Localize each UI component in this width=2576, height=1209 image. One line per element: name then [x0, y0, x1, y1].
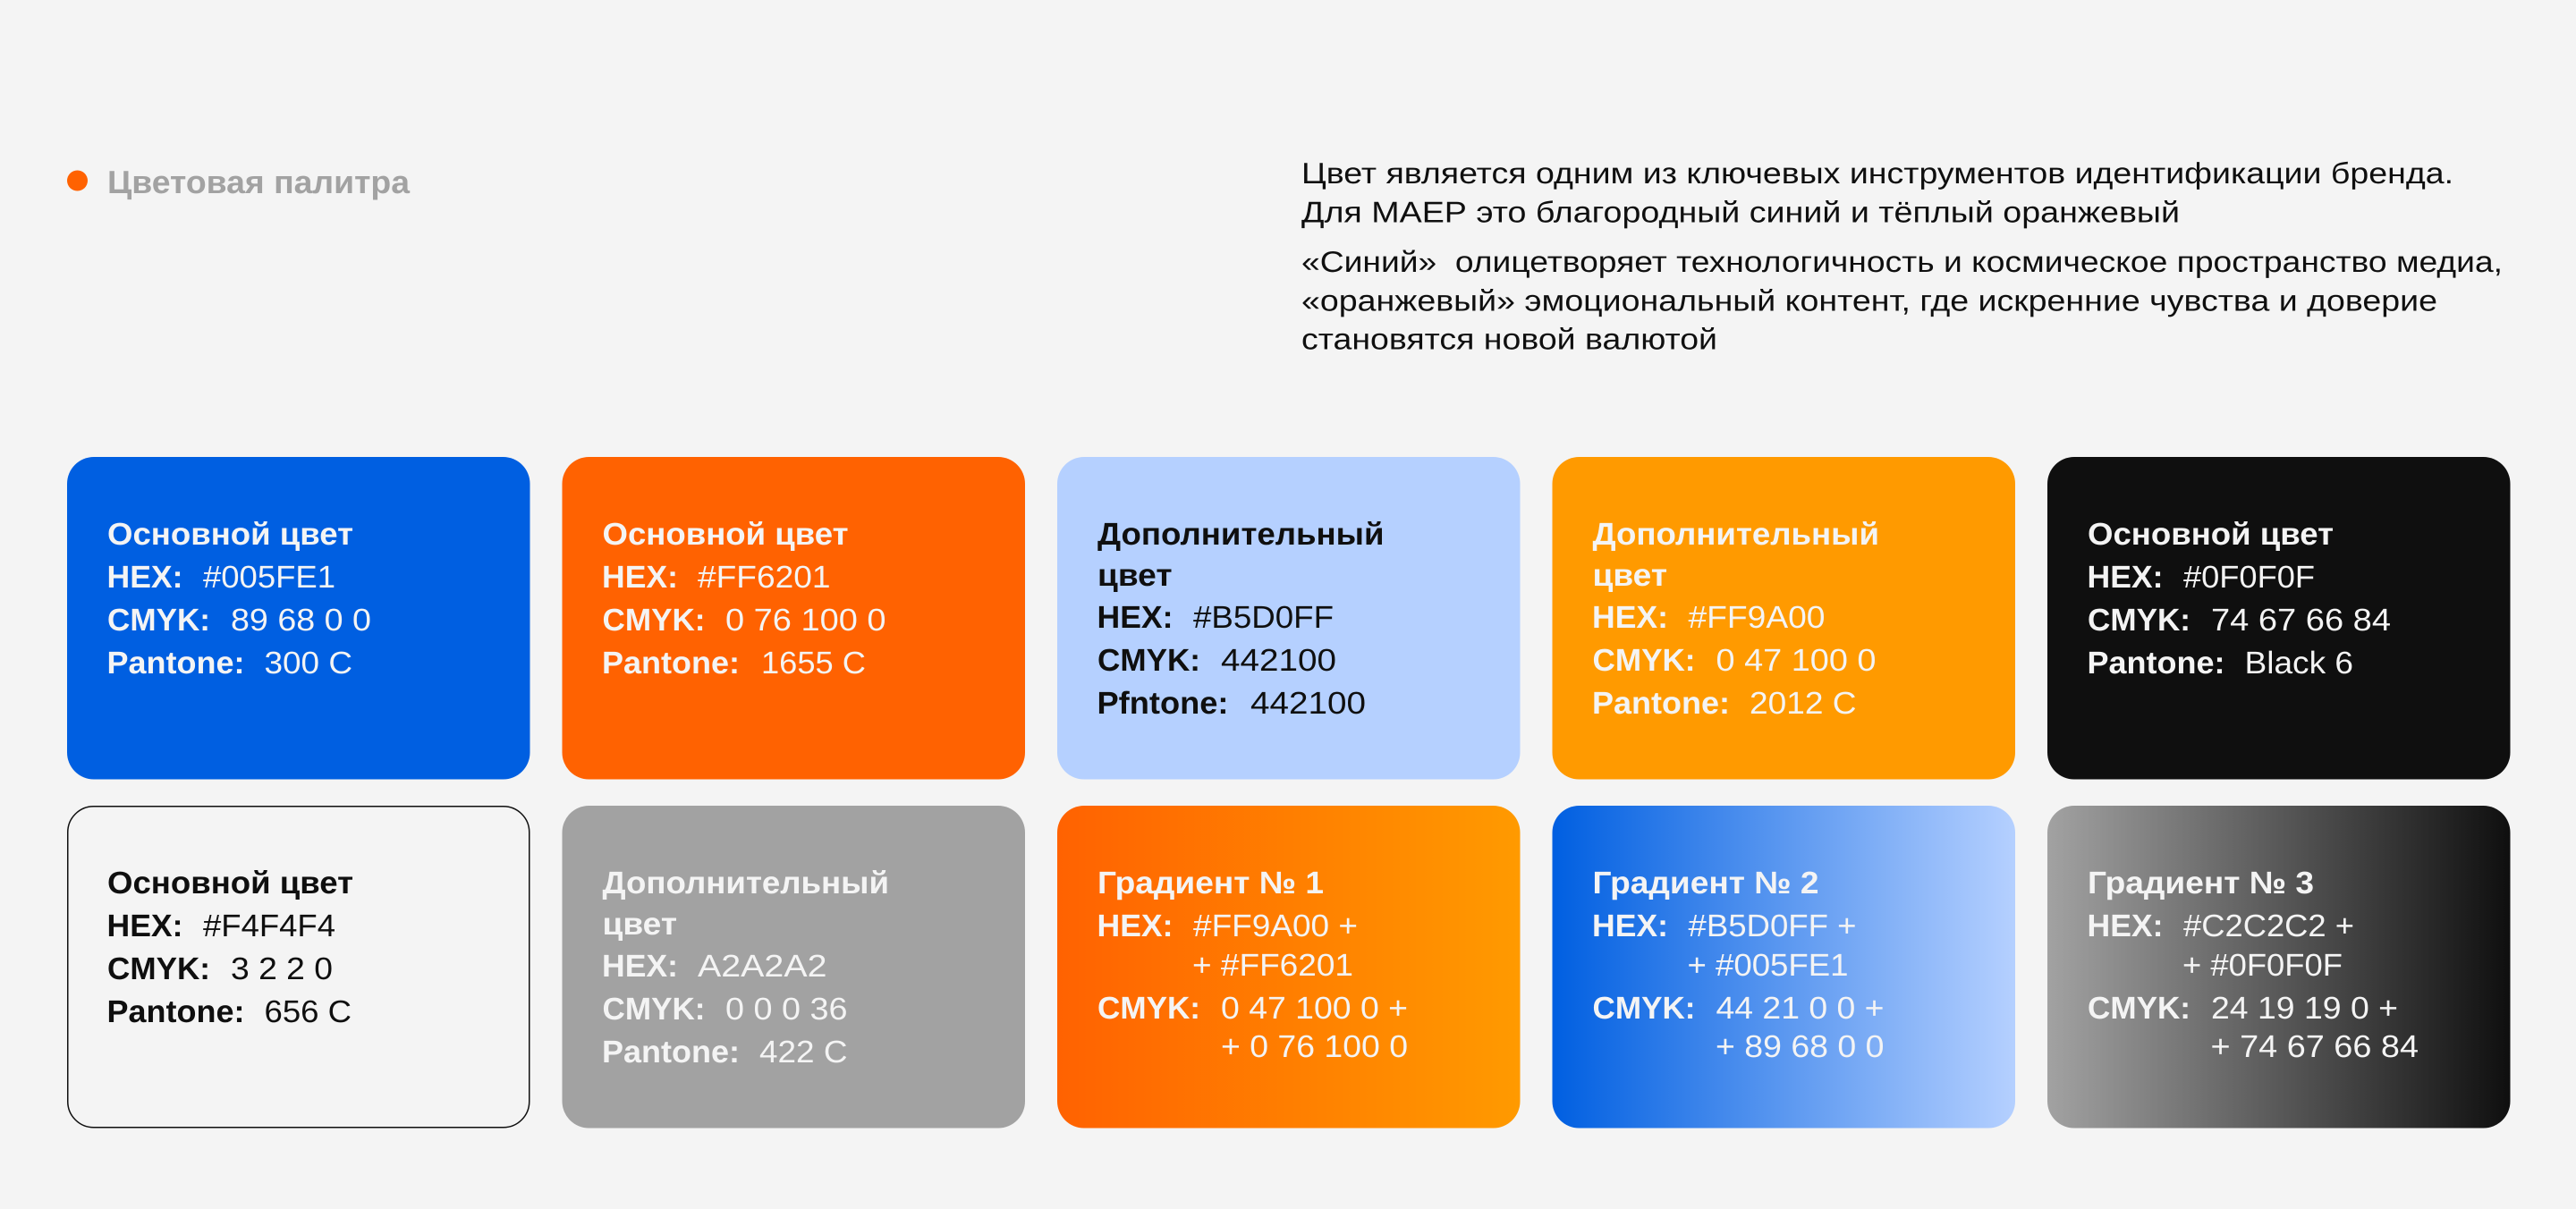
HEX row: #005FE1 [203, 560, 335, 595]
panel: additional amber [1553, 457, 2015, 780]
CMYK rows [2088, 991, 2419, 1064]
swatch [1057, 806, 1521, 1129]
panel: gradient 1 [1057, 806, 1521, 1129]
swatch [562, 806, 1025, 1129]
CMYK row: CMYK: [1592, 643, 1696, 678]
HEX row: #FF6201 [698, 560, 830, 595]
HEX row [1592, 600, 1825, 635]
HEX rows: #C2C2C2 + [2183, 909, 2354, 943]
swatch [1057, 457, 1521, 780]
Pantone row: Pantone: [1592, 686, 1730, 721]
HEX row: #FF9A00 [1689, 600, 1825, 635]
paragraph 1 [1301, 156, 2453, 229]
icon: orange dot [67, 170, 88, 191]
Pantone row [107, 646, 352, 681]
Pantone row: 1655 C [761, 646, 866, 681]
swatch [2047, 457, 2510, 780]
card title [1097, 517, 1385, 593]
HEX row: A2A2A2 [698, 949, 826, 984]
CMYK row: CMYK: [2088, 603, 2190, 638]
Pantone row: 442100 [1250, 686, 1366, 721]
intro text block [1301, 156, 2503, 356]
HEX rows: + #0F0F0F [2182, 948, 2343, 983]
CMYK rows [1592, 991, 1884, 1064]
section heading [67, 164, 411, 200]
CMYK row: 442100 [1221, 643, 1336, 678]
card title: цвет [603, 907, 677, 942]
swatch [67, 457, 530, 780]
HEX rows: #FF9A00 + [1193, 909, 1358, 943]
CMYK rows: CMYK: [1592, 991, 1696, 1026]
HEX row [107, 909, 335, 943]
HEX row [1097, 600, 1334, 635]
HEX rows: HEX: [2088, 909, 2163, 943]
Pantone row [602, 1035, 848, 1070]
HEX rows [1097, 909, 1358, 983]
CMYK row: 89 68 0 0 [231, 603, 371, 638]
HEX row: HEX: [2088, 560, 2163, 595]
panel: primary blue [67, 457, 530, 780]
Pantone row: Pantone: [2088, 646, 2225, 681]
swatch [1553, 457, 2015, 780]
Pantone row: Pantone: [107, 994, 245, 1029]
Pantone row: Black 6 [2245, 646, 2353, 681]
CMYK row: CMYK: [603, 992, 705, 1027]
CMYK row [107, 951, 333, 986]
card title: Основной цвет [2088, 517, 2334, 552]
Pantone row: 656 C [265, 994, 352, 1029]
Pantone row: Pantone: [602, 646, 740, 681]
CMYK row: CMYK: [107, 951, 210, 986]
CMYK row [1592, 643, 1877, 678]
HEX row: #F4F4F4 [203, 909, 335, 943]
card title: цвет [1097, 558, 1172, 593]
panel: primary black [2047, 457, 2510, 780]
CMYK row [603, 603, 886, 638]
panel: gradient 3 [2047, 806, 2510, 1129]
HEX row: #B5D0FF [1193, 600, 1334, 635]
HEX row [2088, 560, 2315, 595]
card title: цвет [1592, 558, 1667, 593]
card title: Основной цвет [107, 517, 353, 552]
HEX row: HEX: [1097, 600, 1174, 635]
HEX row: #0F0F0F [2183, 560, 2315, 595]
CMYK row: 0 0 0 36 [725, 992, 848, 1027]
CMYK row [107, 603, 371, 638]
paragraph 2: «Синий» олицетворяет технологичность и космическое пространство медиа, [1301, 245, 2503, 278]
panel: primary light outlined [68, 807, 530, 1128]
HEX row [602, 560, 830, 595]
CMYK rows: + 0 76 100 0 [1221, 1029, 1408, 1064]
swatch [562, 457, 1025, 780]
Pantone row: 2012 C [1750, 686, 1857, 721]
panel: primary orange [562, 457, 1025, 780]
Pantone row: 422 C [759, 1035, 848, 1070]
CMYK row: CMYK: [107, 603, 210, 638]
swatch [68, 807, 530, 1128]
CMYK rows: + 74 67 66 84 [2211, 1029, 2419, 1064]
card title [603, 866, 889, 942]
Pantone row [107, 994, 352, 1029]
HEX rows [2088, 909, 2354, 983]
card title: Градиент № 1 [1097, 866, 1324, 900]
card title [1592, 517, 1879, 593]
Pantone row [1097, 686, 1366, 721]
paragraph 2: становятся новой валютой [1301, 323, 1717, 356]
HEX row [107, 560, 335, 595]
CMYK rows: 24 19 19 0 + [2211, 991, 2398, 1026]
Pantone row: 300 C [265, 646, 352, 681]
HEX rows: HEX: [1097, 909, 1174, 943]
Pantone row: Pantone: [602, 1035, 740, 1070]
swatch [1553, 806, 2015, 1129]
CMYK rows: + 89 68 0 0 [1716, 1029, 1884, 1064]
HEX rows: + #FF6201 [1192, 948, 1353, 983]
paragraph 1: Для МАЕР это благородный синий и тёплый оранжевый [1301, 196, 2180, 229]
HEX row: HEX: [107, 560, 182, 595]
CMYK row [2088, 603, 2391, 638]
paragraph 2 [1301, 245, 2503, 356]
CMYK row: 0 47 100 0 [1716, 643, 1877, 678]
swatch [2047, 806, 2510, 1129]
paragraph 2: «оранжевый» эмоциональный контент, где искренние чувства и доверие [1301, 283, 2437, 317]
CMYK rows [1097, 991, 1408, 1064]
panel: additional gray [562, 806, 1025, 1129]
card title: Градиент № 2 [1592, 866, 1819, 900]
heading text: Цветовая палитра [107, 164, 411, 200]
HEX row: HEX: [107, 909, 182, 943]
HEX rows [1592, 909, 1857, 983]
Pantone row: Pantone: [107, 646, 245, 681]
CMYK rows: 44 21 0 0 + [1716, 991, 1884, 1026]
CMYK row: CMYK: [603, 603, 705, 638]
card title: Градиент № 3 [2088, 866, 2314, 900]
CMYK row [1097, 643, 1336, 678]
HEX row [602, 949, 826, 984]
CMYK rows: CMYK: [1097, 991, 1200, 1026]
card title: Дополнительный [1097, 517, 1385, 552]
paragraph 1: Цвет является одним из ключевых инструментов идентификации бренда. [1301, 156, 2453, 190]
CMYK row [603, 992, 848, 1027]
CMYK row: 74 67 66 84 [2211, 603, 2391, 638]
CMYK row: CMYK: [1097, 643, 1200, 678]
HEX row: HEX: [602, 949, 678, 984]
Pantone row [602, 646, 866, 681]
HEX rows: HEX: [1592, 909, 1668, 943]
CMYK row: 3 2 2 0 [231, 951, 333, 986]
HEX rows: + #005FE1 [1687, 948, 1848, 983]
CMYK rows: CMYK: [2088, 991, 2190, 1026]
card title: Основной цвет [107, 866, 353, 900]
Pantone row: Pfntone: [1097, 686, 1229, 721]
HEX rows: #B5D0FF + [1689, 909, 1857, 943]
HEX row: HEX: [602, 560, 678, 595]
panel: additional light blue [1057, 457, 1521, 780]
card title: Основной цвет [603, 517, 848, 552]
card title: Дополнительный [1592, 517, 1879, 552]
panel: gradient 2 [1553, 806, 2015, 1129]
card title: Дополнительный [603, 866, 889, 900]
CMYK rows: 0 47 100 0 + [1221, 991, 1408, 1026]
CMYK row: 0 76 100 0 [725, 603, 886, 638]
Pantone row [2088, 646, 2353, 681]
HEX row: HEX: [1592, 600, 1668, 635]
Pantone row [1592, 686, 1857, 721]
